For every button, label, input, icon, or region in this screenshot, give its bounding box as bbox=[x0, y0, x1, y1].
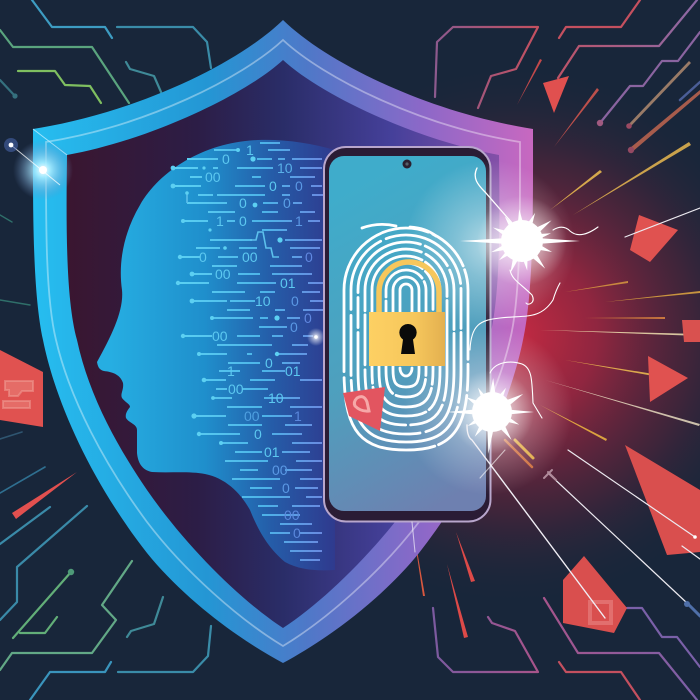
energy streaks: upper right bbox=[517, 59, 700, 215]
fingerprint bbox=[344, 224, 468, 450]
binary code in head: 0 bbox=[291, 293, 299, 309]
binary code in head: 00 bbox=[215, 266, 231, 282]
binary code in head: 0 bbox=[295, 178, 303, 194]
binary code in head: 0 bbox=[283, 195, 291, 211]
crack lines bbox=[412, 168, 605, 618]
binary code in head: 0 bbox=[282, 480, 290, 496]
binary code in head: 0 bbox=[222, 151, 230, 167]
binary code in head: 0 bbox=[254, 426, 262, 442]
shield corner bevel bbox=[33, 129, 67, 155]
shard on phone with icon bbox=[343, 387, 385, 431]
binary code in head: 0 bbox=[290, 319, 298, 335]
shard: red triangle right bbox=[648, 356, 688, 402]
shard: red square right edge bbox=[682, 320, 700, 342]
binary code in head: 01 bbox=[285, 363, 301, 379]
binary code in head: 0 bbox=[304, 310, 312, 326]
phone bbox=[324, 147, 490, 522]
energy streaks: left bbox=[12, 472, 77, 519]
binary code in head: 0 bbox=[305, 249, 313, 265]
binary code in head: 00 bbox=[272, 462, 288, 478]
binary code in head: 10 bbox=[268, 390, 284, 406]
circuit traces: bottom left bbox=[0, 432, 211, 700]
shard: large red polygon bbox=[625, 445, 700, 555]
binary code in head: 1 bbox=[295, 213, 303, 229]
binary code in head: 00 bbox=[244, 408, 260, 424]
binary code in head: 1 bbox=[227, 363, 235, 379]
binary code in head: 0 bbox=[269, 178, 277, 194]
binary code in head: 00 bbox=[212, 328, 228, 344]
binary code in head: 00 bbox=[284, 507, 300, 523]
shield inner panel bbox=[67, 60, 499, 628]
circuit traces: top right bbox=[435, 0, 700, 126]
phone screen bbox=[329, 156, 486, 511]
burst lower bbox=[447, 370, 534, 454]
binary code in head: 0 bbox=[199, 249, 207, 265]
binary code in head: 0 bbox=[293, 525, 301, 541]
spark on shield corner bbox=[4, 138, 73, 200]
shard: red triangle top bbox=[543, 76, 569, 113]
shard: red polygon upper right bbox=[630, 215, 678, 262]
shield highlight line bbox=[46, 40, 520, 646]
padlock shackle bbox=[379, 262, 439, 312]
binary code in head: 10 bbox=[277, 160, 293, 176]
lines crossing shards bbox=[544, 208, 700, 616]
binary code in head: 00 bbox=[242, 249, 258, 265]
binary code in head: 10 bbox=[255, 293, 271, 309]
camera bbox=[402, 160, 412, 168]
binary code in head: 1 bbox=[294, 408, 302, 424]
binary code in head: 1 bbox=[216, 213, 224, 229]
head silhouette bbox=[97, 140, 335, 570]
shard: red polygon with square bbox=[563, 556, 627, 633]
energy streaks: right bbox=[505, 281, 700, 467]
padlock bbox=[369, 262, 445, 366]
padlock body bbox=[369, 312, 445, 366]
energy streaks: lower bbox=[412, 522, 475, 638]
burst upper bbox=[460, 196, 580, 286]
phone body bbox=[324, 147, 490, 522]
binary code in head: 00 bbox=[228, 381, 244, 397]
binary code in head bbox=[171, 142, 323, 560]
shield outer band bbox=[33, 20, 533, 663]
binary code in head: 0 bbox=[239, 195, 247, 211]
binary code in head: 01 bbox=[264, 444, 280, 460]
sparkle in head bbox=[307, 328, 325, 346]
keyhole bbox=[399, 324, 417, 354]
shard: red polygon left with icon bbox=[0, 350, 43, 427]
circuit traces: top left bbox=[0, 0, 211, 305]
shield bbox=[33, 20, 533, 663]
binary code in head: 1 bbox=[246, 142, 254, 158]
binary code in head: 00 bbox=[205, 169, 221, 185]
binary code in head: 0 bbox=[239, 213, 247, 229]
screen light glow bbox=[403, 160, 575, 495]
circuit traces: bottom right bbox=[433, 598, 700, 700]
binary code in head: 01 bbox=[280, 275, 296, 291]
binary code in head: 0 bbox=[265, 355, 273, 371]
